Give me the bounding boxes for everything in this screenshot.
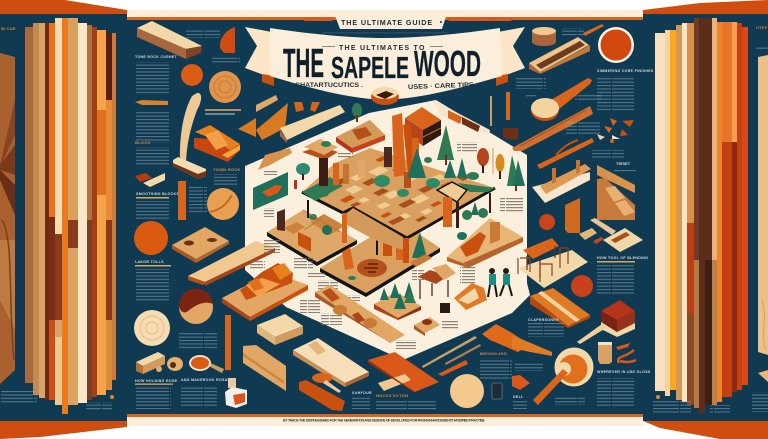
balcony frame	[437, 182, 491, 228]
text block: paddle caption	[515, 362, 543, 371]
central navy panel	[127, 10, 643, 426]
text block: plank caption	[528, 318, 564, 337]
dining set scene	[518, 238, 588, 288]
small orange block	[512, 375, 530, 390]
thin sticks	[422, 336, 481, 376]
label lines	[562, 28, 584, 36]
wooden spoon	[531, 78, 592, 121]
small label text	[516, 78, 601, 136]
text block: lower center right	[480, 351, 512, 380]
tray	[603, 228, 643, 252]
left panel captions	[1, 26, 114, 411]
banner fine print	[322, 32, 448, 34]
orange burst disc	[134, 221, 168, 255]
text block: mallet caption: SUHFOUR	[352, 391, 372, 395]
platform center	[320, 220, 440, 297]
small base with dark mark	[414, 303, 450, 336]
main title: THE	[283, 40, 324, 86]
deck columns	[307, 200, 409, 263]
right wood slab	[758, 55, 768, 382]
text block: bottom center: DELL	[513, 395, 524, 399]
text block: tables: HOW TOOL OF BLENDING	[597, 256, 648, 260]
left tagline: CHATARTUCUTICS .	[295, 82, 363, 89]
small labels	[186, 30, 241, 115]
orange mallet	[312, 373, 341, 393]
orange offcut	[565, 198, 580, 233]
right column items	[512, 24, 654, 409]
left wood veneer strips	[25, 18, 116, 414]
deck greenery	[317, 148, 479, 197]
text block: tone rock: TONE ROCK CUSHET	[135, 55, 178, 59]
offcut pieces	[135, 173, 165, 187]
text block: grip caption: HUCKS EXTON	[376, 393, 408, 398]
long carved board	[315, 285, 405, 344]
dark cube	[405, 107, 441, 146]
striped bench plank	[530, 288, 590, 328]
text block: bottom left a	[135, 379, 178, 409]
tree block	[374, 282, 421, 320]
right panel captions	[653, 25, 768, 414]
text block: bottom left a: HOW HOLDING ROSE	[135, 379, 178, 383]
main title	[283, 40, 481, 86]
top pieces above the hexagon	[256, 95, 345, 170]
wood swirl disc	[207, 188, 239, 220]
lumber blocks on deck	[345, 166, 460, 221]
text block: lower center right: BROOKLING	[480, 351, 507, 356]
long plank	[188, 241, 275, 286]
right wood veneer strips	[655, 18, 748, 413]
subheading: THE ULTIMATES TO	[339, 45, 425, 52]
isometric wood workshop scene	[222, 92, 525, 349]
pale grain disc	[134, 310, 170, 346]
orange paddle	[512, 335, 552, 356]
text block: simmering: SIMMERING CORE FINISHES	[597, 69, 654, 73]
under deck interior	[347, 208, 403, 250]
left side panel	[0, 0, 127, 439]
text block: town rock: TOWN ROCK	[213, 167, 241, 172]
text block: smoothing blocks: SMOOTHING BLOCKS	[136, 192, 179, 196]
text block: grip caption	[376, 393, 436, 410]
wooden bench	[532, 160, 591, 203]
banner body	[270, 28, 502, 100]
right trees	[437, 125, 525, 191]
orange stick	[583, 24, 604, 36]
green wall panel	[253, 172, 288, 210]
text block: care	[597, 370, 651, 408]
divider marks	[322, 46, 443, 48]
small raised red block with garden	[336, 103, 385, 153]
cluster of wood chips	[597, 118, 634, 143]
left column items	[134, 21, 275, 409]
wooden ring	[156, 357, 183, 372]
left panel captions: W CUE	[1, 26, 16, 31]
carved board	[172, 227, 229, 263]
ribbon tails	[245, 27, 525, 86]
text labels on cream	[250, 142, 523, 349]
small sticks	[579, 218, 616, 244]
text block: block	[135, 140, 170, 165]
orange tongs	[537, 138, 594, 169]
wood ring disc	[209, 71, 241, 103]
light wooden cube	[257, 314, 303, 345]
text block: town rock	[213, 167, 241, 185]
people	[488, 268, 512, 297]
triangle offcut	[238, 118, 256, 137]
text block: tone rock	[135, 55, 178, 94]
upper floor deck with trees and blocks	[302, 113, 495, 263]
orange squiggle chips	[616, 343, 636, 363]
orange disc	[181, 64, 203, 86]
stacked lumber	[243, 345, 286, 391]
text block: tables	[597, 256, 648, 294]
orange plank with handle	[368, 352, 439, 393]
grooved cream bar	[293, 338, 369, 387]
platform left	[267, 209, 357, 266]
red layered cube	[601, 300, 635, 337]
text block: roller caption	[555, 396, 585, 405]
left wood slab	[0, 53, 15, 384]
orange burl disc	[598, 27, 634, 63]
text block: tirset	[614, 161, 636, 173]
deck uprights	[302, 113, 419, 188]
text block: lower left: LAKOR TOLLS	[135, 260, 164, 264]
right side panel	[643, 0, 768, 439]
brush	[598, 342, 612, 364]
big cream corner	[512, 220, 530, 313]
orange sofa	[194, 125, 240, 162]
red disc	[571, 275, 593, 297]
text block: simmering	[597, 69, 654, 112]
small red disc	[539, 214, 555, 230]
floating tree and figure	[294, 163, 310, 189]
dark and tan disc	[179, 288, 213, 324]
sofa platform	[222, 263, 308, 321]
text block: bar caption	[189, 186, 207, 214]
icon: red sail	[220, 27, 235, 53]
icon: wooden bowl	[371, 87, 399, 105]
right tagline: USES · CARE TIPS	[408, 82, 475, 91]
wooden stack	[597, 165, 635, 220]
roller	[533, 348, 594, 405]
banner tab	[303, 10, 512, 29]
orange bar	[178, 181, 186, 220]
title banner	[245, 10, 525, 105]
text block: bottom left b: AND MAKEROOK ROSANE	[181, 378, 234, 382]
pencil	[135, 100, 168, 105]
text block: smoothing blocks	[135, 192, 179, 220]
main title: SAPELE	[331, 50, 409, 85]
diagonal plank	[529, 37, 590, 74]
text block: plank caption: CLAPERSONER	[528, 318, 559, 322]
lower center items	[243, 314, 530, 411]
wooden puck	[532, 27, 556, 46]
varnish jar	[225, 378, 247, 408]
tall orange bar	[225, 315, 231, 370]
text block: tirset: TIRSET	[616, 161, 631, 166]
orange plank	[482, 324, 530, 352]
ornate orange plank	[512, 106, 593, 151]
main title: WOOD	[414, 43, 481, 84]
text block: middle	[135, 111, 170, 143]
right panel captions: UTEF	[756, 25, 768, 30]
cream hexagon background	[245, 100, 527, 360]
spoon tool	[173, 93, 206, 179]
footer note: BY TRACE THE DISTINGUISHED FOR THE GENERATION AND DESIGNS OF DEVELOPED FOR FROM ENHANCEMENTS MODIFIED PRACTISE	[283, 418, 485, 422]
banner tab: THE ULTIMATE GUIDE	[341, 18, 433, 27]
platform right	[447, 218, 523, 268]
wood block	[136, 352, 165, 374]
small jar	[492, 383, 502, 399]
cream disc	[450, 374, 484, 408]
cream handle	[577, 324, 606, 344]
table and arch	[418, 264, 487, 310]
orange beam	[299, 380, 345, 411]
cream pointed board	[433, 92, 518, 140]
text block: disc caption	[179, 333, 217, 350]
text block: care: WHEREVER IN USE GLOSS	[597, 370, 651, 374]
text block: bottom left b	[181, 378, 234, 408]
text block: tongs caption	[592, 150, 624, 158]
text block: bottom center	[513, 395, 527, 409]
magnifier	[189, 355, 224, 373]
plank	[137, 21, 202, 59]
text block: mallet caption	[352, 391, 372, 409]
text block: lower left	[135, 260, 171, 302]
text block: block: BLOCK	[135, 140, 151, 145]
